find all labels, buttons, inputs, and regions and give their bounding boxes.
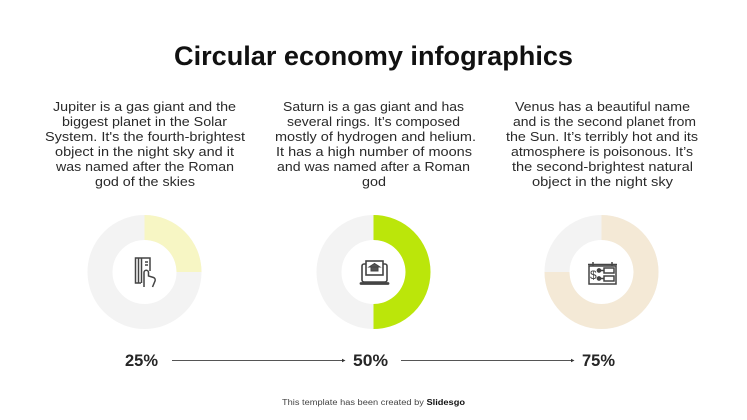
text block: Saturn: and was named after a Roman: [277, 160, 470, 174]
text block: Venus: atmosphere is poisonous. It’s: [511, 145, 693, 159]
arrow: 25 to 50: [172, 359, 346, 362]
text block: Jupiter: System. It's the fourth-brightest: [45, 130, 246, 144]
text block: Venus: Venus has a beautiful name: [515, 100, 690, 114]
donut chart: 25%: [100, 215, 202, 316]
text block: Saturn: several rings. It’s composed: [287, 115, 460, 129]
text block: Venus: and is the second planet from: [513, 115, 696, 129]
text block: Venus: [506, 100, 698, 189]
text block: Saturn: [275, 100, 476, 189]
text block: Venus: object in the night sky: [532, 175, 674, 189]
text block: Venus: the Sun. It’s terribly hot and its: [506, 130, 698, 144]
donut chart: 75%: [544, 215, 658, 329]
percentage: 75%: 75%: [582, 352, 615, 370]
percentage: 50%: 50%: [353, 352, 388, 370]
icon: laptop: [361, 261, 388, 284]
text block: Jupiter: god of the skies: [95, 175, 195, 189]
text block: Venus: the second-brightest natural: [512, 160, 693, 174]
icon: card in hand: [136, 258, 155, 287]
text block: Saturn: mostly of hydrogen and helium.: [275, 130, 476, 144]
text block: Jupiter: biggest planet in the Solar: [62, 115, 227, 129]
donut chart: 50%: [329, 215, 431, 329]
text block: Jupiter: Jupiter is a gas giant and the: [53, 100, 236, 114]
arrow: 50 to 75: [401, 359, 574, 362]
footer credit: This template has been created by Slidesgo: [282, 398, 465, 407]
text block: Jupiter: [45, 100, 246, 189]
icon: dollar sign: $: [590, 268, 597, 282]
text block: Jupiter: object in the night sky and it: [55, 145, 235, 159]
text block: Saturn: It has a high number of moons: [276, 145, 472, 159]
icon: price board: [588, 262, 617, 284]
percentage: 25%: 25%: [125, 352, 158, 370]
text block: Jupiter: was named after the Roman: [55, 160, 234, 174]
text block: Saturn: Saturn is a gas giant and has: [283, 100, 464, 114]
title: Circular economy infographics: [174, 41, 573, 71]
text block: Saturn: god: [362, 175, 386, 189]
